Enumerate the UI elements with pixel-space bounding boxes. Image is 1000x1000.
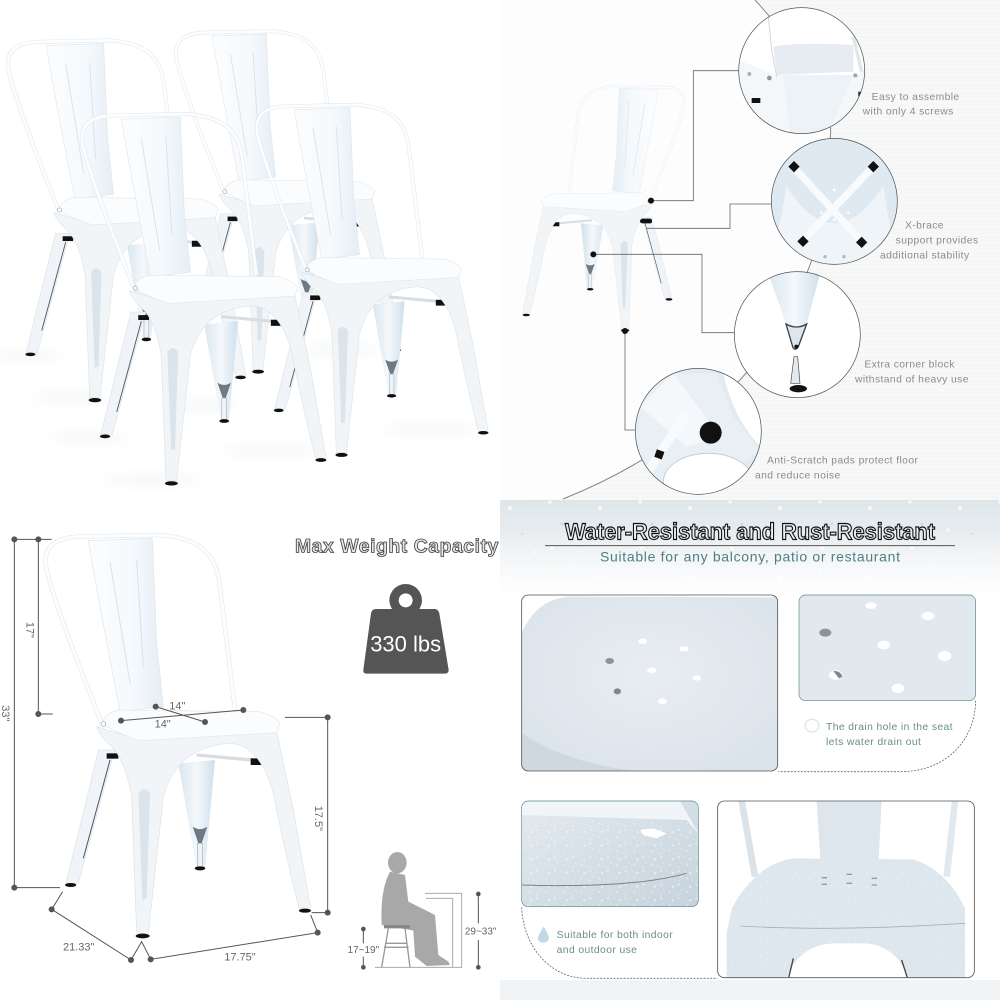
- dashed outline: outdoor: [522, 907, 717, 978]
- icon: seated person with table: 29~33": [465, 926, 497, 937]
- text: drain hole: lets water drain out: [826, 737, 921, 748]
- circle: anti-scratch pad detail: [634, 368, 762, 495]
- text: x-brace: support provides: [896, 236, 978, 247]
- text: easy to assemble: [862, 92, 960, 118]
- panel: water resistant: [500, 500, 1000, 1000]
- text: corner block: Extra corner block: [864, 359, 955, 370]
- text: anti-scratch: Anti-Scratch pads protect floor: [767, 456, 918, 467]
- chair back right: [176, 31, 401, 374]
- panel: dimensions: [0, 535, 499, 970]
- icon: 330 lbs weight: [363, 584, 449, 674]
- text: anti-scratch: [755, 456, 918, 481]
- circle: screws detail: [738, 8, 867, 134]
- chair front left: [82, 114, 326, 485]
- text: corner block: [854, 359, 969, 385]
- panel: chair close-up with droplets: [718, 801, 974, 978]
- panel: seat holes photo: [522, 595, 778, 772]
- dimension labels: 17.5": [312, 806, 324, 831]
- heading rule: [545, 544, 955, 547]
- text: corner block: withstand of heavy use: [854, 374, 969, 385]
- text: drain hole: [826, 722, 953, 748]
- floor shadows: [0, 347, 480, 483]
- panel: feature callouts: [500, 0, 1000, 510]
- dimension labels: 17": [24, 622, 36, 638]
- dimension lines: [11, 536, 331, 963]
- text: easy to assemble: Easy to assemble: [872, 92, 960, 103]
- icon: seated person with table: [348, 852, 497, 970]
- text: x-brace: additional stability: [880, 250, 970, 261]
- connectors: [590, 71, 772, 430]
- dimension labels: 14": [155, 718, 171, 730]
- chair back left: [8, 40, 246, 402]
- text: indoor and outdoor: Suitable for both indoor: [557, 930, 673, 941]
- text: x-brace: X-brace: [905, 220, 944, 231]
- text: indoor and outdoor: [557, 930, 673, 956]
- large arc background: [500, 0, 831, 500]
- dashed outline: drain: [778, 701, 976, 772]
- text: x-brace: [880, 220, 978, 261]
- subheading: Suitable for any balcony, patio or restaurant: [600, 548, 900, 564]
- panel: four chairs: [0, 31, 489, 485]
- chair front right: [257, 105, 489, 457]
- dimension labels: [0, 622, 324, 964]
- icon: seated person with table: 17~19": [348, 945, 380, 956]
- text: drain hole: The drain hole in the seat: [826, 722, 953, 733]
- dimension labels: 17.75": [224, 952, 256, 964]
- dimension labels: 21.33": [63, 942, 94, 954]
- arc line: [563, 0, 831, 499]
- icon: 330 lbs weight: 330 lbs: [370, 631, 441, 656]
- icon: drain hole: [805, 719, 819, 732]
- dimension labels: 14": [169, 700, 185, 712]
- text: easy to assemble: with only 4 screws: [862, 107, 954, 118]
- text: indoor and outdoor: and outdoor use: [557, 945, 637, 956]
- heading: water and rust resistant: Water-Resistant and Rust-Resistant: [565, 518, 935, 544]
- panel: drain hole close-up: [799, 595, 976, 701]
- heading: max weight capacity: Max Weight Capacity: [295, 536, 499, 557]
- dimensioned chair: [46, 535, 311, 938]
- circle: x-brace detail: [771, 138, 897, 267]
- text: anti-scratch: and reduce noise: [755, 470, 841, 481]
- icon: water drop: [538, 927, 549, 943]
- callout chair: [523, 86, 684, 332]
- panel: droplets on seat edge: [522, 801, 698, 907]
- circle: corner block detail: [734, 272, 860, 398]
